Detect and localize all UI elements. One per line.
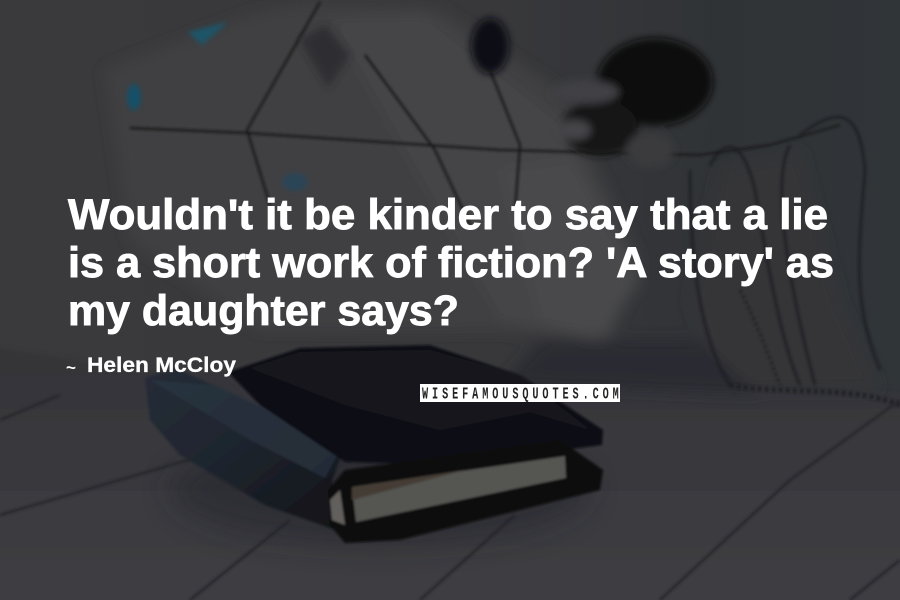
author attribution: Helen McCloy <box>87 354 236 377</box>
upper black cover <box>228 345 603 465</box>
dark beads and blobs <box>300 18 713 168</box>
tilde: ~ <box>66 358 76 377</box>
quote text: Wouldn't it be kinder to say that a lie <box>68 191 828 239</box>
watermark: WISEFAMOUSQUOTES.COM <box>422 385 619 405</box>
necklace strands <box>690 117 900 405</box>
lower black cover <box>328 440 603 543</box>
leather cover <box>145 368 345 530</box>
quote text: is a short work of fiction? 'A story' as <box>68 239 834 287</box>
blurred colour accents <box>127 22 308 191</box>
blurred papers <box>105 5 880 395</box>
floor planks <box>0 395 900 600</box>
notebook illustration <box>145 345 603 545</box>
dark wire lines <box>130 2 840 225</box>
quote text <box>68 191 834 335</box>
quote text: my daughter says? <box>68 287 459 335</box>
pages <box>352 456 566 522</box>
